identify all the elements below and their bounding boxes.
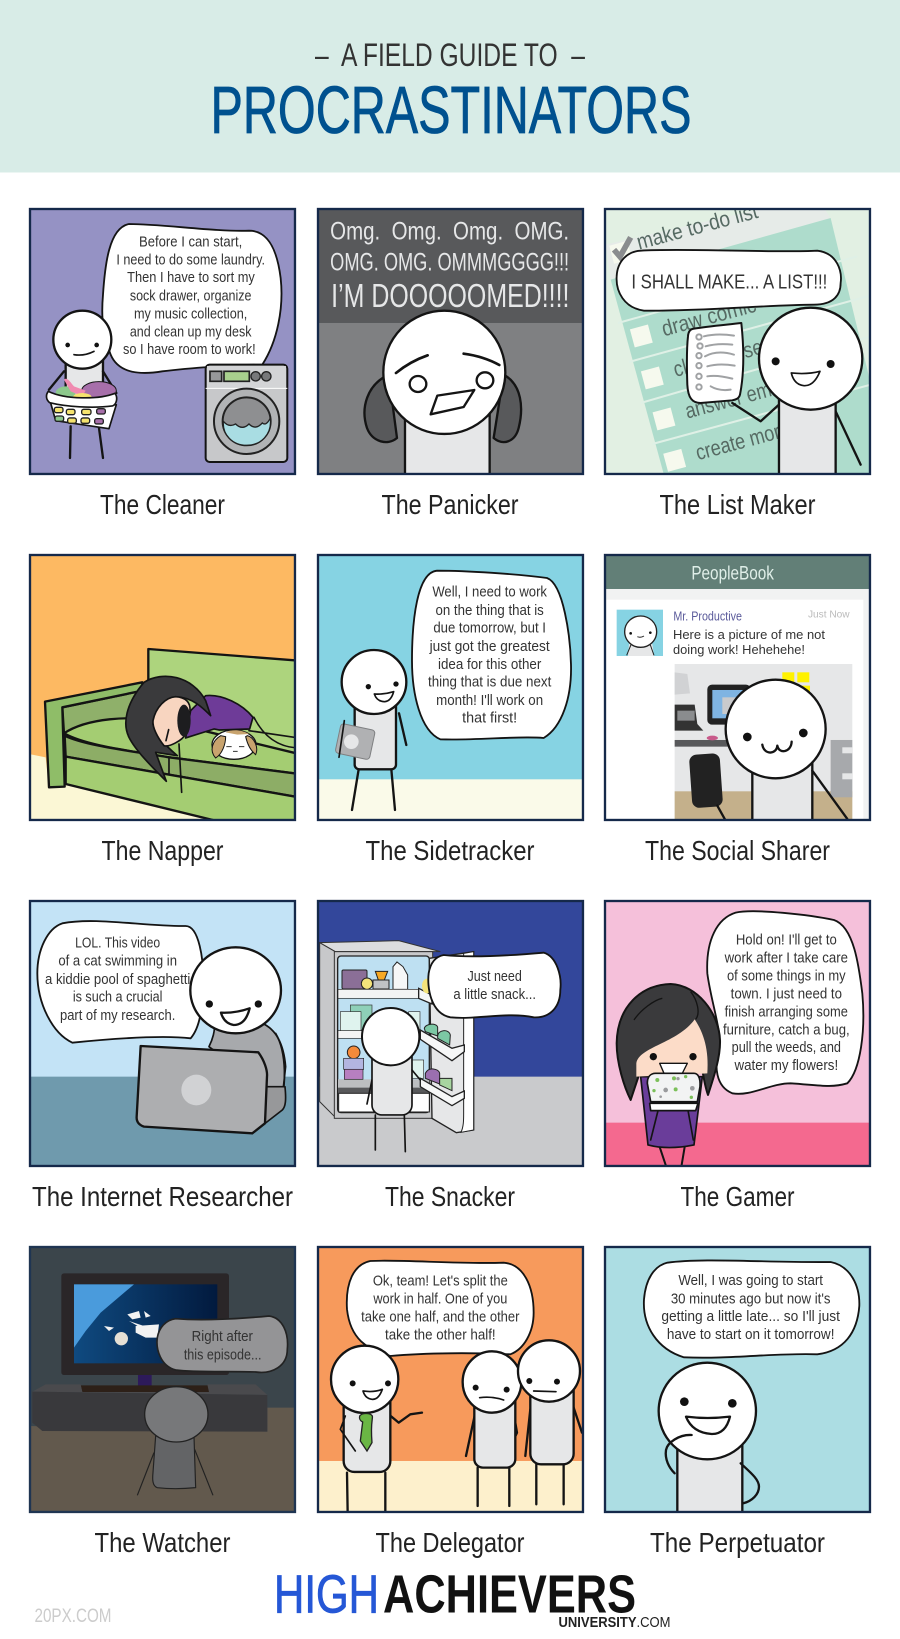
speech bubble: is such a crucial bbox=[73, 990, 162, 1006]
speech bubble: due tomorrow, but I bbox=[433, 621, 546, 637]
speech bubble: town. I just need to bbox=[731, 986, 842, 1002]
speech bubble: have to start on it tomorrow! bbox=[667, 1327, 834, 1343]
speech bubble: part of my research. bbox=[60, 1008, 175, 1024]
caption: The Perpetuator: The Perpetuator bbox=[650, 1527, 825, 1558]
speech bubble: 30 minutes ago but now it's bbox=[671, 1291, 830, 1307]
panel: The Social Sharer bbox=[604, 554, 871, 831]
caption: The Snacker: The Snacker bbox=[385, 1181, 515, 1212]
speech bubble: take the other half! bbox=[385, 1327, 496, 1343]
speech bubble: of some things in my bbox=[727, 968, 846, 984]
speech bubble: month! I'll work on bbox=[436, 693, 543, 709]
panel: The Napper bbox=[29, 554, 299, 824]
open fridge bbox=[320, 941, 474, 1133]
panic text bbox=[331, 222, 568, 308]
character at laptop bbox=[137, 947, 286, 1133]
speech bubble: Before I can start, bbox=[139, 234, 242, 250]
speech bubble: this episode... bbox=[184, 1347, 261, 1363]
logo: High Achievers University: HIGH bbox=[274, 1564, 379, 1624]
character with laundry basket bbox=[46, 311, 117, 458]
speech bubble bbox=[644, 1260, 859, 1358]
thinking character bbox=[659, 1363, 759, 1533]
to-do list paper: make to-do list bbox=[634, 198, 760, 254]
panel: The Sidetracker bbox=[317, 554, 584, 821]
to-do list paper: answer email bbox=[682, 372, 792, 423]
speech bubble: and clean up my desk bbox=[130, 324, 252, 340]
speech bubble bbox=[617, 250, 841, 311]
speech bubble: that first! bbox=[462, 711, 517, 727]
speech bubble: furniture, catch a bug, bbox=[723, 1022, 850, 1038]
speech bubble: water my flowers! bbox=[734, 1058, 838, 1074]
app header bbox=[604, 554, 871, 821]
media console bbox=[32, 1384, 267, 1432]
caption: The Panicker: The Panicker bbox=[382, 489, 518, 520]
television bbox=[61, 1273, 229, 1391]
panic text: OMG. OMG. OMMMGGGG!!! bbox=[330, 250, 569, 277]
speech bubble: my music collection, bbox=[134, 306, 247, 322]
character from behind bbox=[362, 1008, 420, 1152]
speech bubble: Hold on! I'll get to bbox=[736, 932, 837, 948]
speech bubble: Just need bbox=[467, 969, 522, 985]
panic text: Omg. Omg. Omg. OMG. bbox=[330, 218, 569, 245]
to-do list paper: create more bbox=[693, 416, 793, 465]
panel: The Snacker bbox=[317, 900, 584, 1167]
to-do list paper: clean closet bbox=[670, 333, 770, 382]
to-do list paper bbox=[606, 198, 871, 475]
speech bubble: of a cat swimming in bbox=[58, 954, 177, 970]
speech bubble: I SHALL MAKE... A LIST!!! bbox=[631, 271, 827, 294]
logo: High Achievers University: UNIVERSITY.COM bbox=[558, 1614, 670, 1631]
post header: doing work! Hehehehe! bbox=[673, 643, 805, 657]
speech bubble: a little snack... bbox=[453, 987, 536, 1003]
speech bubble bbox=[37, 921, 203, 1043]
dog bbox=[212, 730, 257, 759]
app header: PeopleBook bbox=[691, 564, 774, 585]
speech bubble bbox=[347, 1261, 534, 1356]
panel: The Panicker bbox=[317, 208, 584, 488]
speech bubble: on the thing that is bbox=[435, 603, 544, 619]
caption: The Internet Researcher: The Internet Researcher bbox=[32, 1181, 293, 1212]
caption: The Napper: The Napper bbox=[102, 835, 224, 866]
speech bubble bbox=[428, 953, 561, 1018]
caption: The Gamer: The Gamer bbox=[680, 1181, 794, 1212]
speech bubble: pull the weeds, and bbox=[732, 1040, 841, 1056]
speech bubble bbox=[157, 1316, 288, 1372]
speech bubble: sock drawer, organize bbox=[130, 288, 251, 304]
speech bubble: idea for this other bbox=[438, 657, 541, 673]
caption: The Cleaner: The Cleaner bbox=[100, 489, 225, 520]
character with tablet bbox=[335, 650, 406, 810]
logo: High Achievers University bbox=[274, 1564, 670, 1631]
post header: Mr. Productive bbox=[673, 610, 742, 624]
speech bubble: Well, I was going to start bbox=[678, 1273, 823, 1289]
gamer character bbox=[617, 984, 720, 1167]
header band bbox=[0, 0, 900, 172]
speech bubble: work after I take care bbox=[724, 950, 848, 966]
speech bubble bbox=[102, 224, 281, 373]
speech bubble: getting a little late... so I'll just bbox=[661, 1309, 840, 1325]
selfie photo bbox=[675, 664, 852, 831]
character with list bbox=[687, 308, 862, 495]
washing machine bbox=[206, 365, 287, 462]
speech bubble: Then I have to sort my bbox=[127, 270, 255, 286]
speech bubble bbox=[412, 571, 571, 740]
panel: The Perpetuator bbox=[604, 1246, 871, 1533]
speech bubble: LOL. This video bbox=[75, 936, 160, 952]
panel: The Gamer bbox=[604, 900, 871, 1167]
speech bubble: finish arranging some bbox=[725, 1004, 848, 1020]
panel: The List Maker bbox=[604, 198, 871, 495]
title: PROCRASTINATORS bbox=[210, 73, 692, 148]
speech bubble: thing that is due next bbox=[428, 675, 551, 691]
speech bubble: take one half, and the other bbox=[361, 1309, 520, 1325]
panic text: I’M DOOOOOMED!!!! bbox=[331, 278, 569, 315]
speech bubble: Right after bbox=[192, 1329, 253, 1345]
speech bubble: just got the greatest bbox=[429, 639, 550, 655]
post header: Just Now bbox=[808, 609, 850, 620]
caption: The Social Sharer: The Social Sharer bbox=[645, 835, 830, 866]
caption: The List Maker: The List Maker bbox=[660, 489, 816, 520]
caption: The Delegator: The Delegator bbox=[376, 1527, 524, 1558]
post header: Here is a picture of me not bbox=[673, 628, 825, 642]
panel: The Watcher bbox=[29, 1246, 296, 1513]
panel: The Cleaner bbox=[29, 208, 296, 475]
to-do list paper: draw comic bbox=[659, 292, 759, 341]
boss character with tie bbox=[331, 1346, 422, 1513]
panicking character bbox=[365, 311, 521, 488]
teammate left bbox=[463, 1351, 521, 1506]
speech bubble bbox=[707, 911, 863, 1094]
watcher from behind bbox=[137, 1387, 213, 1495]
speech bubble: Ok, team! Let's split the bbox=[373, 1273, 508, 1289]
caption: The Sidetracker: The Sidetracker bbox=[366, 835, 534, 866]
panel: The Internet Researcher bbox=[29, 900, 296, 1167]
speech bubble: I need to do some laundry. bbox=[116, 252, 265, 268]
sleeping person bbox=[126, 676, 299, 792]
speech bubble: work in half. One of you bbox=[372, 1291, 507, 1307]
logo: High Achievers University: ACHIEVERS bbox=[383, 1564, 636, 1624]
couch bbox=[45, 649, 299, 824]
post header bbox=[617, 609, 850, 657]
speech bubble: a kiddie pool of spaghetti bbox=[45, 972, 190, 988]
teammate right bbox=[518, 1340, 582, 1504]
speech bubble: so I have room to work! bbox=[123, 342, 256, 358]
subtitle: – A FIELD GUIDE TO – bbox=[315, 37, 585, 73]
watermark: 20PX.COM: 20PX.COM bbox=[34, 1605, 112, 1627]
speech bubble: Well, I need to work bbox=[432, 585, 548, 601]
caption: The Watcher: The Watcher bbox=[94, 1527, 230, 1558]
panel: The Delegator bbox=[317, 1246, 584, 1513]
